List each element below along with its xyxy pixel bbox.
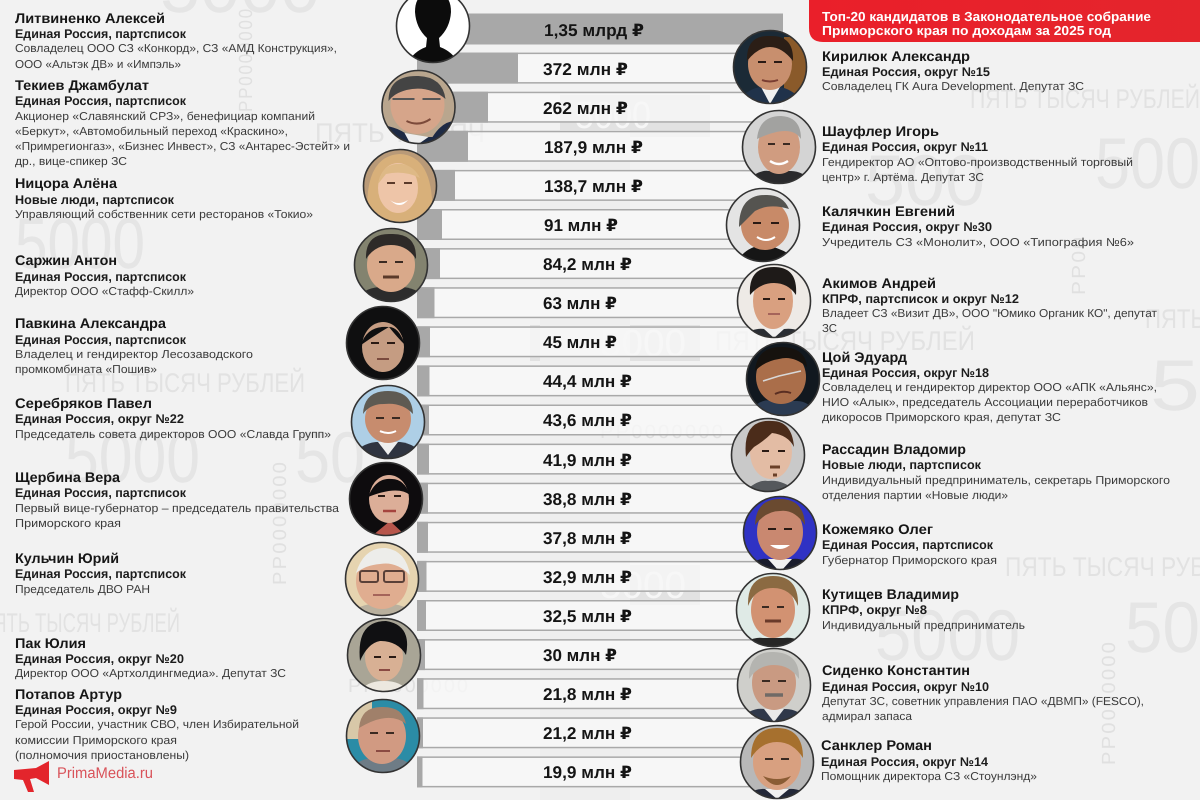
text: Кульчин Юрий: Кульчин Юрий (15, 550, 119, 566)
bar: 37,8 млн: 37,8 млн ₽ (543, 529, 632, 548)
background: banknote watermark pattern: РР0000000 (600, 422, 725, 443)
text: Текиев Джамбулат: «Примрегионгаз», «Бизнес Инвест», СЗ «Антарес-Эстейт» и (15, 141, 350, 153)
bar: 63 млн (417, 287, 783, 318)
text: Пак Юлия: Пак Юлия (15, 635, 86, 651)
text: Сиденко Константин (822, 662, 1144, 723)
bar: 30 млн (417, 639, 783, 670)
bar: 21,2 млн (417, 717, 783, 748)
bar: 43,6 млн (417, 404, 783, 436)
photo: Литвиненко, silhouette (396, 0, 470, 63)
text: Павкина Александра: Павкина Александра (15, 315, 166, 331)
bar: 21,8 млн (417, 678, 783, 709)
text: Санклер Роман (821, 737, 1037, 783)
bar: 262 млн: 262 млн ₽ (543, 99, 628, 118)
text: Потапов Артур: (полномочия приостановлены) (15, 750, 189, 762)
photo: Цой (746, 342, 820, 416)
photo: Кирилюк (733, 30, 808, 104)
text: Кирилюк Александр (822, 48, 1084, 93)
photo: Калячкин (726, 188, 800, 262)
text: Щербина Вера: Щербина Вера (15, 469, 120, 485)
text: Павкина Александра (15, 315, 253, 376)
bar: 32,9 млн: 32,9 млн ₽ (543, 568, 632, 587)
icon: megaphone (14, 761, 49, 792)
text: Текиев Джамбулат: «Беркут», «Автомобильный переход «Краскино», (15, 126, 288, 138)
bar: 45 млн: 45 млн ₽ (543, 333, 617, 352)
bar: 187,9 млн: 187,9 млн ₽ (544, 138, 643, 157)
photo: Кульчин (345, 542, 419, 616)
text: Калячкин Евгений: Калячкин Евгений (822, 203, 955, 219)
text: Потапов Артур: комиссии Приморского края (15, 735, 177, 747)
text: Акимов Андрей: КПРФ, партсписок и округ №12 (822, 292, 1019, 306)
text: Калячкин Евгений: Единая Россия, округ №30 (822, 220, 992, 234)
text: Цой Эдуард: Единая Россия, округ №18 (822, 366, 989, 380)
text: Текиев Джамбулат: Акционер «Славянский СРЗ», бенефициар компаний (15, 111, 315, 123)
bar: 38,8 млн: 38,8 млн ₽ (543, 490, 632, 509)
text: Сиденко Константин: адмирал запаса (822, 711, 913, 723)
bar: 138,7 млн (417, 170, 783, 201)
bar: 187,9 млн (417, 131, 783, 162)
photo: Пак (347, 618, 421, 692)
text: Литвиненко Алексей: ООО «Альтэк ДВ» и «Импэль» (15, 59, 181, 71)
bar: 91 млн (417, 209, 783, 240)
text: Литвиненко Алексей: Единая Россия, партсписок (15, 27, 187, 41)
bar: 19,9 млн: 19,9 млн ₽ (543, 763, 632, 782)
title banner (809, 0, 1200, 42)
bar: 45 млн (417, 326, 783, 357)
text: Литвиненко Алексей: Литвиненко Алексей (15, 10, 165, 26)
text: Ницора Алёна: Новые люди, партсписок (15, 193, 175, 207)
text: Кирилюк Александр: Совладелец ГК Aura Development. Депутат ЗС (822, 81, 1084, 93)
photo: Санклер (740, 725, 814, 799)
title banner: Приморского края по доходам за 2025 год (822, 23, 1112, 38)
text: Акимов Андрей: Акимов Андрей (822, 275, 936, 291)
photo: Павкина (346, 306, 420, 380)
text: Рассадин Владомир: отделения партии «Новые люди» (822, 490, 1008, 502)
bar: 44,4 млн (417, 365, 783, 396)
background: banknote watermark pattern: РР0000000 (348, 676, 470, 697)
text: Павкина Александра: Единая Россия, партсписок (15, 333, 187, 347)
bar: 21,8 млн: 21,8 млн ₽ (543, 685, 632, 704)
text: Шауфлер Игорь: Шауфлер Игорь (822, 123, 939, 139)
text: Кутищев Владимир: Кутищев Владимир (822, 586, 959, 602)
text: Текиев Джамбулат: Единая Россия, партсписок (15, 94, 187, 108)
text: Цой Эдуард (822, 349, 1157, 424)
photo: Текиев (382, 70, 456, 144)
bar: 41,9 млн: 41,9 млн ₽ (543, 451, 632, 470)
photo: Щербина (349, 462, 423, 536)
photo: Ницора (363, 149, 437, 223)
text: Потапов Артур (15, 686, 299, 762)
background: banknote watermark pattern: 5000 (575, 95, 651, 137)
title banner: Топ-20 кандидатов в Законодательное собрание (822, 9, 1151, 24)
bar: 1,35 млрд (417, 14, 783, 44)
text: Саржин Антон (15, 252, 194, 298)
background: banknote watermark pattern: 500 (865, 141, 985, 221)
background: banknote watermark pattern: 5000 (600, 565, 686, 607)
bar: 32,5 млн (417, 600, 783, 631)
text: Саржин Антон: Единая Россия, партсписок (15, 270, 187, 284)
text: Рассадин Владомир: Рассадин Владомир (822, 441, 966, 457)
background: banknote watermark pattern: 5000 (600, 323, 686, 365)
background: banknote watermark pattern: 5000 (15, 204, 145, 284)
text: Ницора Алёна: Ницора Алёна (15, 175, 117, 191)
background: banknote watermark pattern: 5 (1150, 346, 1200, 426)
bar: 43,6 млн: 43,6 млн ₽ (543, 411, 632, 430)
photo: Акимов (737, 264, 811, 338)
text: Литвиненко Алексей (15, 10, 337, 71)
text: Кожемяко Олег: Губернатор Приморского края (822, 555, 997, 567)
text: Литвиненко Алексей: Совладелец ООО СЗ «Конкорд», СЗ «АМД Конструкция», (15, 43, 337, 55)
text: Сиденко Константин: Сиденко Константин (822, 662, 970, 678)
bar: 372 млн: 372 млн ₽ (543, 60, 628, 79)
text: Шауфлер Игорь: Гендиректор АО «Оптово-производственный торговый (822, 157, 1133, 169)
text: Серебряков Павел: Серебряков Павел (15, 395, 152, 411)
text: Санклер Роман: Единая Россия, округ №14 (821, 755, 988, 769)
photo: Кожемяко (743, 496, 817, 570)
text: Павкина Александра: Владелец и гендиректор Лесозаводского (15, 349, 253, 361)
text: Шауфлер Игорь: Единая Россия, округ №11 (822, 140, 988, 154)
bar: 63 млн: 63 млн ₽ (543, 294, 617, 313)
text: Кожемяко Олег: Единая Россия, партсписок (822, 538, 994, 552)
bar: 32,9 млн (417, 561, 783, 592)
text: Цой Эдуард: Совладелец и гендиректор директор ООО «АПК «Альянс», (822, 382, 1157, 394)
logo: PrimaMedia (14, 761, 153, 792)
bar: 44,4 млн: 44,4 млн ₽ (543, 372, 632, 391)
text: Санклер Роман: Санклер Роман (821, 737, 932, 753)
text: Санклер Роман: Помощник директора СЗ «Стоунлэнд» (821, 771, 1037, 783)
background: banknote watermark pattern: ПЯТЬ ТЫСЯЧ РУБЛЕЙ (715, 325, 975, 356)
background: banknote watermark pattern: РР00 (1069, 235, 1090, 295)
background: banknote watermark pattern: 50 (295, 418, 365, 498)
text: Кожемяко Олег (822, 521, 997, 567)
bar chart: candidates' income (417, 14, 783, 787)
photo: Серебряков (351, 385, 425, 459)
text: Цой Эдуард: Цой Эдуард (822, 349, 907, 365)
text: Потапов Артур: Потапов Артур (15, 686, 122, 702)
photo: Потапов (346, 699, 420, 773)
text: Акимов Андрей (822, 275, 1158, 335)
photo: Шауфлер (742, 110, 816, 184)
text: Сиденко Константин: Депутат ЗС, советник управления ПАО «ДВМП» (FESCO), (822, 696, 1144, 708)
background: banknote watermark pattern: РР0000000 (1099, 640, 1120, 765)
text: Пак Юлия: Единая Россия, округ №20 (15, 652, 184, 666)
background: banknote watermark pattern: 5000 (875, 596, 1020, 676)
photo: Кутищев (736, 573, 810, 647)
bar: 38,8 млн (417, 483, 783, 514)
text: Акимов Андрей: ЗС (822, 323, 837, 335)
bar: 1,35 млрд: 1,35 млрд ₽ (544, 21, 644, 40)
text: Щербина Вера: Приморского края (15, 518, 121, 530)
text: Потапов Артур: Единая Россия, округ №9 (15, 703, 177, 717)
bar: 37,8 млн (417, 522, 783, 553)
bar: 91 млн: 91 млн ₽ (544, 216, 618, 235)
text: Сиденко Константин: Единая Россия, округ №10 (822, 680, 989, 694)
text: Рассадин Владомир (822, 441, 1170, 502)
bar: 19,9 млн (417, 756, 783, 787)
text: Павкина Александра: промкомбината «Пошив» (15, 364, 157, 376)
text: Кутищев Владимир: Индивидуальный предприниматель (822, 620, 1025, 632)
bar: 41,9 млн (417, 444, 783, 475)
text: Саржин Антон: Директор ООО «Стафф-Скилл» (15, 286, 194, 298)
background: banknote watermark pattern: 5000 (65, 418, 200, 498)
bar: 262 млн (417, 92, 783, 123)
text: Серебряков Павел: Единая Россия, округ №22 (15, 412, 184, 426)
text: Калячкин Евгений (822, 203, 1134, 249)
text: Кульчин Юрий: Председатель ДВО РАН (15, 584, 150, 596)
text: Текиев Джамбулат (15, 77, 350, 168)
text: Рассадин Владомир: Новые люди, партсписок (822, 458, 982, 472)
text: Кульчин Юрий (15, 550, 187, 596)
text: Текиев Джамбулат: др., вице-спикер ЗС (15, 156, 127, 168)
bar: 372 млн (417, 53, 783, 84)
text: Пак Юлия: Директор ООО «Артхолдингмедиа». Депутат ЗС (15, 668, 286, 680)
text: Цой Эдуард: НИО «Алык», председатель Ассоциации переработчиков (822, 397, 1148, 409)
photo: Саржин (354, 228, 428, 302)
bar: 84,2 млн (417, 248, 783, 279)
text: Рассадин Владомир: Индивидуальный предприниматель, секретарь Приморского (822, 475, 1170, 487)
bar: 21,2 млн: 21,2 млн ₽ (543, 724, 632, 743)
bar: 138,7 млн: 138,7 млн ₽ (544, 177, 643, 196)
photo: Рассадин (731, 418, 805, 492)
bar: 84,2 млн: 84,2 млн ₽ (543, 255, 632, 274)
background: banknote watermark pattern: ПЯТЬ ТЫСЯЧ РУБЛЕЙ (65, 367, 305, 398)
text: Кирилюк Александр: Кирилюк Александр (822, 48, 970, 64)
text: Кульчин Юрий: Единая Россия, партсписок (15, 567, 187, 581)
text: Акимов Андрей: Владеет СЗ «Визит ДВ», ООО "Юмико Органик КО", депутат (822, 308, 1158, 320)
text: Щербина Вера: Первый вице-губернатор – председатель правительства (15, 503, 340, 515)
logo: PrimaMedia: PrimaMedia.ru (57, 765, 153, 782)
text: Ницора Алёна (15, 175, 313, 221)
text: Шауфлер Игорь (822, 123, 1133, 184)
text: Кутищев Владимир: КПРФ, округ №8 (822, 603, 927, 617)
bar: 32,5 млн: 32,5 млн ₽ (543, 607, 632, 626)
text: Саржин Антон: Саржин Антон (15, 252, 117, 268)
bar: 30 млн: 30 млн ₽ (543, 646, 617, 665)
text: Щербина Вера: Единая Россия, партсписок (15, 486, 187, 500)
text: Текиев Джамбулат: Текиев Джамбулат (15, 77, 149, 93)
text: Потапов Артур: Герой России, участник СВО, член Избирательной (15, 719, 299, 731)
text: Щербина Вера (15, 469, 340, 530)
text: Кутищев Владимир (822, 586, 1025, 632)
text: Калячкин Евгений: Учредитель СЗ «Монолит», ООО «Типография №6» (822, 237, 1134, 249)
text: Цой Эдуард: дикоросов Приморского края, депутат ЗС (822, 412, 1061, 424)
text: Серебряков Павел: Председатель совета директоров ООО «Славда Групп» (15, 429, 331, 441)
text: Кирилюк Александр: Единая Россия, округ №15 (822, 65, 990, 79)
background: banknote watermark pattern: РР0000000 (270, 460, 291, 585)
background: banknote watermark pattern: ПЯТЬ ТЫСЯЧ (315, 118, 485, 148)
text: Шауфлер Игорь: центр» г. Артёма. Депутат ЗС (822, 172, 984, 184)
text: Пак Юлия (15, 635, 286, 680)
text: Кожемяко Олег: Кожемяко Олег (822, 521, 933, 537)
photo: Сиденко (737, 648, 811, 722)
text: Ницора Алёна: Управляющий собственник сети ресторанов «Токио» (15, 209, 313, 221)
text: Серебряков Павел (15, 395, 331, 441)
